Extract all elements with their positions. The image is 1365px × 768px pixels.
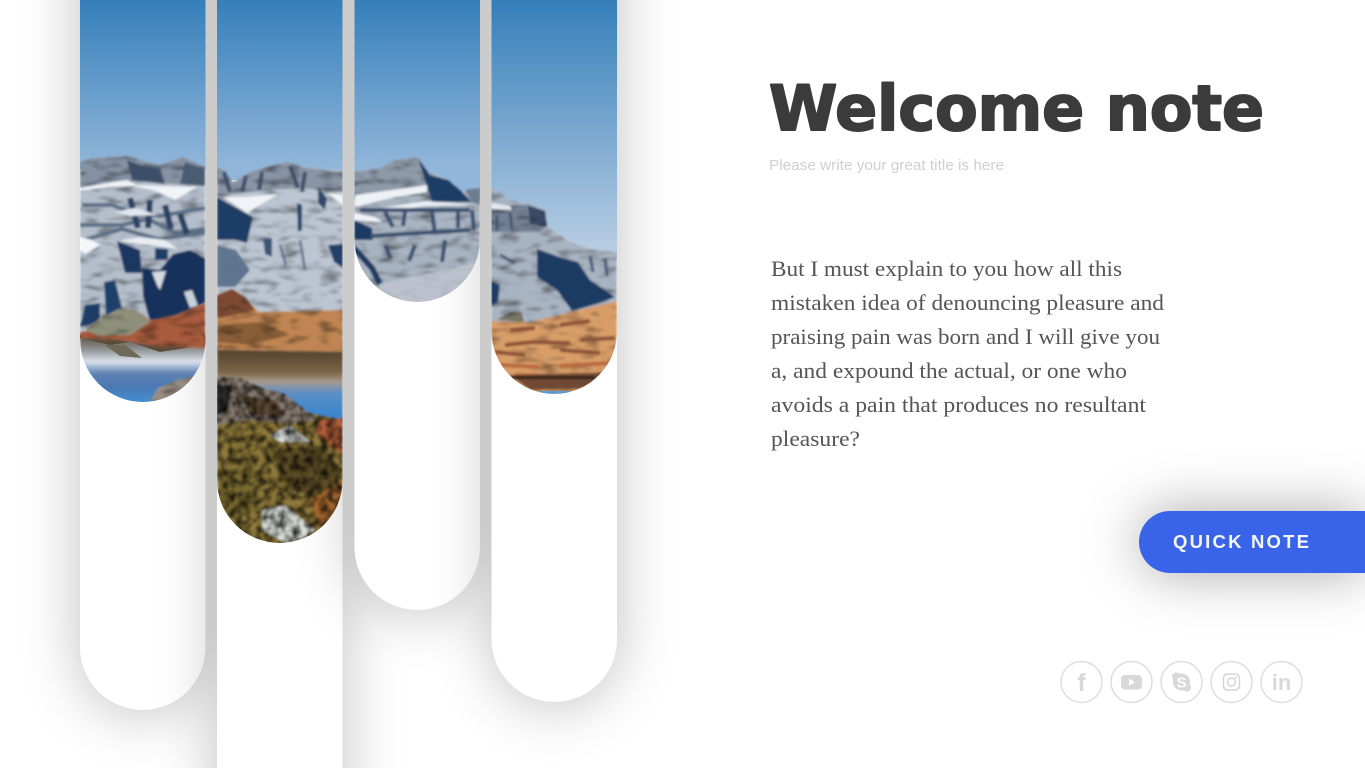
body text: But I must explain to you how all this (771, 256, 1122, 281)
social icons (1061, 662, 1302, 702)
body text (771, 256, 1164, 451)
body text: mistaken idea of denouncing pleasure and (771, 290, 1164, 315)
body text: avoids a pain that produces no resultant (771, 392, 1146, 417)
icon: youtube (1111, 662, 1152, 702)
icon: facebook (1061, 662, 1102, 702)
icon: skype: S (1176, 674, 1187, 692)
icon: skype (1161, 662, 1202, 702)
body text: praising pain was born and I will give you (771, 324, 1160, 349)
photo strip 2 (217, 0, 343, 545)
icon: linkedin (1261, 662, 1302, 702)
quick note button: QUICK NOTE (1173, 531, 1309, 552)
title: Welcome note (769, 72, 1264, 145)
photo strip 3 (354, 0, 481, 305)
body text: pleasure? (771, 426, 860, 451)
icon: linkedin: in (1272, 670, 1291, 695)
subtitle: Please write your great title is here (769, 158, 1004, 174)
photo strip 1 (80, 0, 206, 405)
quick note button (1139, 511, 1365, 573)
icon: instagram (1211, 662, 1252, 702)
white pill columns (80, 0, 617, 768)
icon: facebook: f (1077, 669, 1086, 697)
photo strip 4 (491, 0, 618, 396)
body text: a, and expound the actual, or one who (771, 358, 1127, 383)
